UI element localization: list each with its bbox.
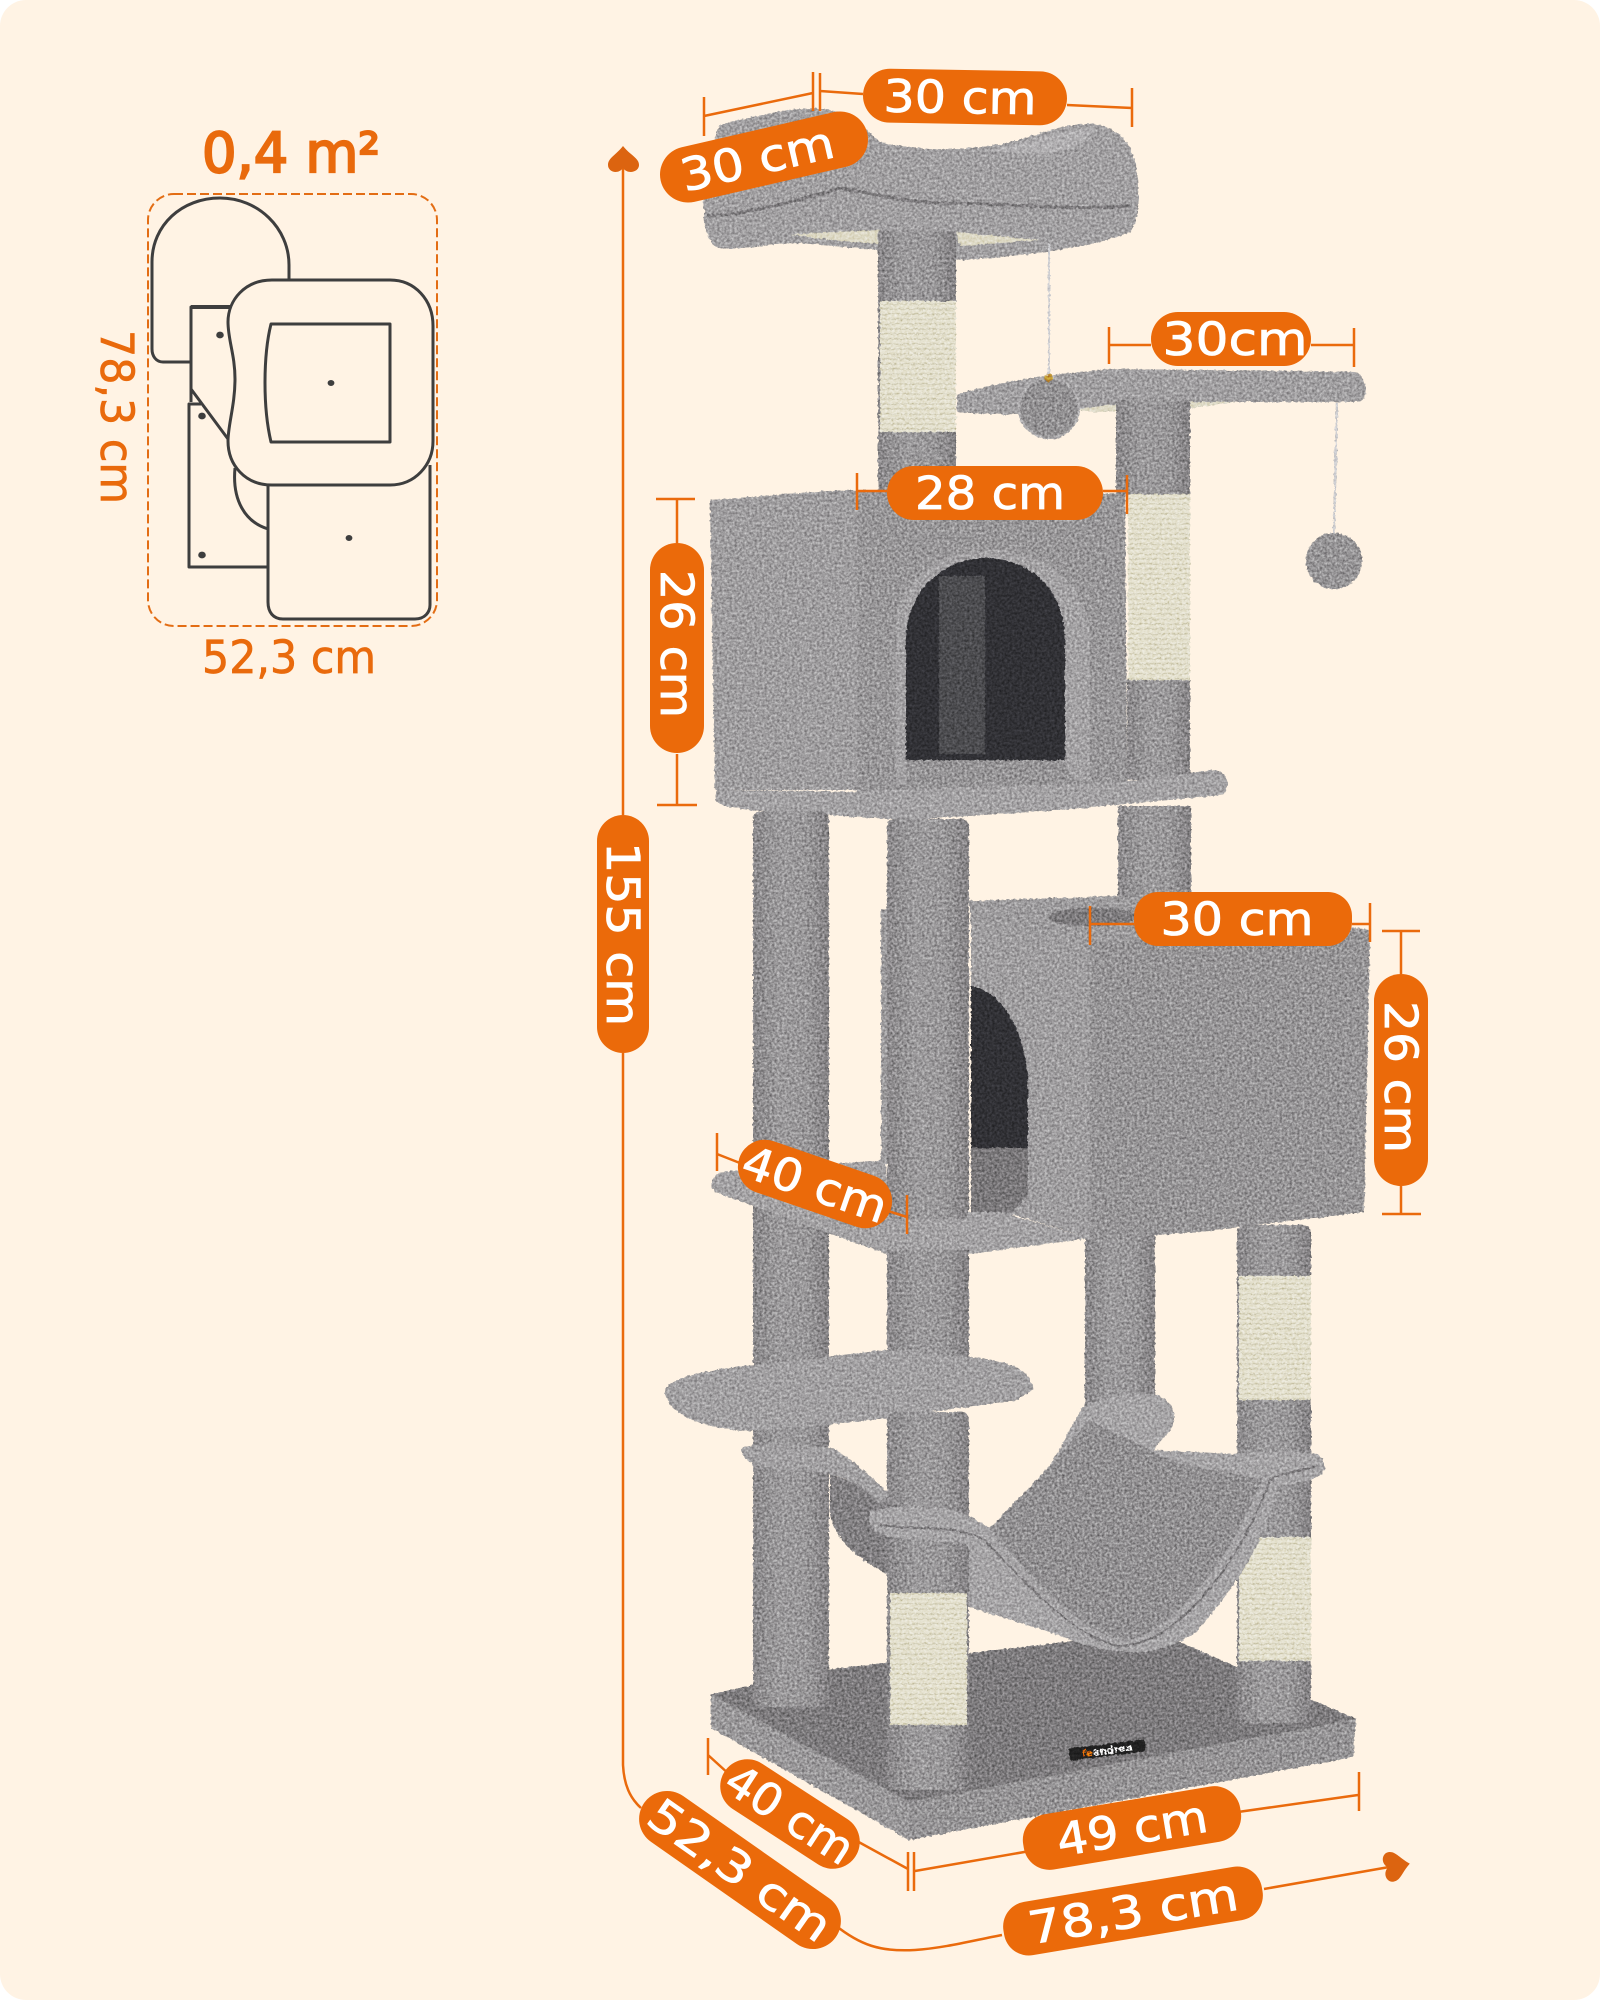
upper house [710, 490, 1127, 795]
top perch bed [703, 109, 1139, 301]
label: lower house width 30 cm: 30 cm [1160, 893, 1314, 946]
inner bed outline [265, 324, 390, 442]
label: lower shelf 40 cm: 40 cm [735, 1135, 894, 1234]
height arrow 155 cm line [608, 146, 641, 1808]
upper house shelf [715, 770, 1227, 820]
label: upper house height 26 cm [650, 543, 704, 753]
small oval perch [665, 1350, 1034, 1431]
brand tag [1069, 1739, 1146, 1762]
top perch outline [228, 280, 433, 485]
second perch [957, 369, 1366, 460]
shelf outlines [189, 307, 268, 567]
label: top perch depth 30 cm [654, 106, 874, 208]
footprint top view diagram [148, 194, 437, 626]
footprint area heading: 0,4 m² [202, 121, 380, 185]
lower house [881, 896, 1370, 1240]
cat tree product photo [665, 109, 1370, 1840]
label: footprint 52,3 cm: 52,3 cm [638, 1788, 842, 1953]
tall posts behind lower house [753, 806, 1311, 1723]
label: upper house width 28 cm [887, 466, 1103, 520]
label: top perch width 30 cm [863, 68, 1067, 126]
hammock [741, 1394, 1325, 1652]
dimension lines [656, 72, 1421, 1891]
label: lower house width 30 cm [1134, 892, 1352, 946]
brand tag: feandrea [1081, 1743, 1133, 1760]
label: lower house height 26 cm [1374, 974, 1428, 1186]
label: top perch depth 30 cm: 30 cm [675, 116, 839, 202]
centre post [887, 819, 969, 1370]
label: footprint 78,3 cm: 78,3 cm [1024, 1868, 1242, 1955]
footprint depth label: 52,3 cm [202, 631, 376, 684]
label: footprint 52,3 cm [628, 1780, 852, 1960]
label: base depth 40 cm: 40 cm [715, 1753, 864, 1876]
label: lower house height 26 cm: 26 cm [1374, 1001, 1427, 1153]
label: upper house width 28 cm: 28 cm [915, 467, 1065, 520]
label: upper house height 26 cm: 26 cm [650, 570, 703, 718]
post markers [198, 332, 352, 558]
label: base width 49 cm [1019, 1782, 1245, 1874]
hanging pompom toys [1019, 244, 1362, 589]
footprint width label: 78,3 cm [90, 330, 143, 504]
label: top perch width 30 cm: 30 cm [883, 70, 1037, 125]
oval perch outline [152, 198, 289, 362]
base outline [235, 465, 430, 619]
upper right post [1116, 400, 1191, 948]
label: footprint 78,3 cm [999, 1863, 1267, 1959]
lower house shelf [712, 1160, 1090, 1262]
top post [878, 231, 956, 491]
footprint arrow 78,3 cm line [835, 1849, 1412, 1950]
label: second perch 30cm: 30cm [1162, 313, 1308, 366]
centre post lower [887, 1412, 969, 1790]
label: base width 49 cm: 49 cm [1053, 1790, 1211, 1867]
base board [711, 1640, 1356, 1840]
dashed bounding box [148, 194, 437, 626]
label: total height 155 cm: 155 cm [596, 842, 649, 1026]
